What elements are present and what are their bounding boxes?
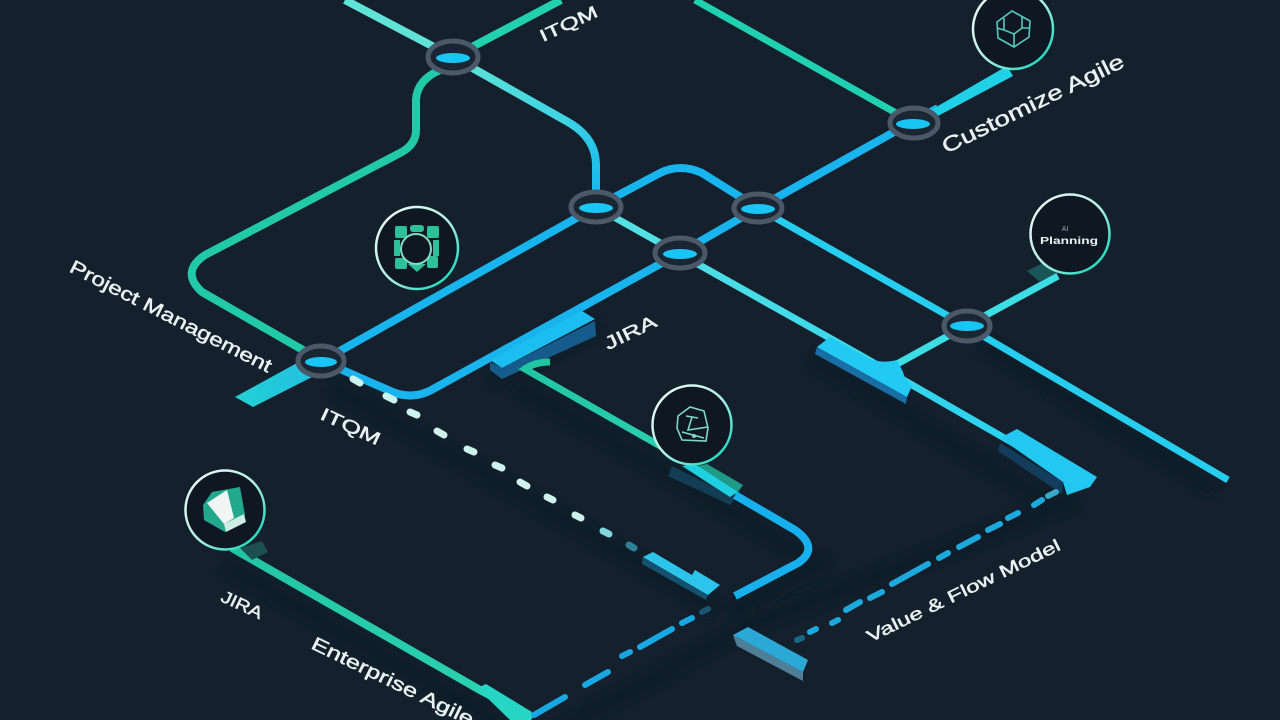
- icon circle: green box: [186, 470, 264, 550]
- station: central north junction: [571, 192, 621, 222]
- line: bottom green from JIRA to enterprise agile: [232, 548, 532, 718]
- line: top right green diagonal: [695, 0, 912, 122]
- line: middle green from hook to circle: [525, 362, 685, 460]
- label: JIRA lower left: JIRA: [218, 587, 266, 623]
- dashed blue line lower left: [534, 609, 708, 715]
- patch: teal under JIRA circle: [240, 541, 268, 560]
- thick band: central station platform: [815, 337, 912, 404]
- dashed pale line: [353, 379, 634, 548]
- thick band: left teal platform: [235, 363, 318, 407]
- line: branch from ai circle through junction: [897, 276, 1058, 364]
- station: ITQM junction: [428, 41, 478, 73]
- label: Customize Agile: Customize Agile: [938, 50, 1128, 158]
- label: JIRA center: JIRA: [601, 311, 660, 354]
- icon circle: cube outline: [973, 0, 1053, 69]
- line: blue corner on lower right: [735, 495, 808, 596]
- circle caption: Planning: Planning: [1040, 236, 1098, 247]
- circle caption: AI: AI: [1062, 226, 1068, 233]
- platform: bottom green end: [477, 684, 532, 720]
- line: central cyan trunk: [596, 207, 1060, 470]
- station: right junction: [944, 311, 990, 341]
- station: central south junction: [655, 238, 705, 268]
- line: upper blue arch: [322, 168, 758, 361]
- thick band: blue platform by JIRA label: [490, 311, 596, 379]
- label: Enterprise Agile: Enterprise Agile: [308, 634, 477, 720]
- block: grey blue platform: [733, 627, 808, 681]
- thick band: right platform: [998, 429, 1097, 495]
- station: project management junction: [298, 346, 344, 376]
- label: Value & Flow Model: Value & Flow Model: [864, 536, 1063, 646]
- patch: teal under ai circle: [1027, 262, 1058, 282]
- band: cyan to upper right circle: [931, 66, 1013, 117]
- line: long cyan branch to right: [758, 208, 1228, 480]
- line: green loop on left: [192, 70, 440, 361]
- line: lower blue from customize agile to project management: [322, 108, 938, 396]
- dashed blue line lower right: [797, 492, 1056, 640]
- label: ITQM top: ITQM: [537, 2, 601, 46]
- label: Project Management: Project Management: [66, 257, 276, 378]
- line: top green diagonal: [453, 0, 561, 57]
- line shadows: [225, 325, 1215, 720]
- station: central east junction: [734, 194, 782, 222]
- icon circle: AI Planning: [1030, 194, 1110, 274]
- block: cyan platform on dashed line: [642, 552, 720, 600]
- label: ITQM lower: ITQM: [317, 404, 384, 449]
- icon circle: helmet outline: [652, 386, 732, 464]
- line: top-left pale teal to central junction: [345, 0, 596, 205]
- icon circle: ornate square emblem: [376, 207, 458, 289]
- station: customize agile junction: [890, 108, 938, 138]
- thick band: green and cyan platform below circle: [668, 464, 743, 505]
